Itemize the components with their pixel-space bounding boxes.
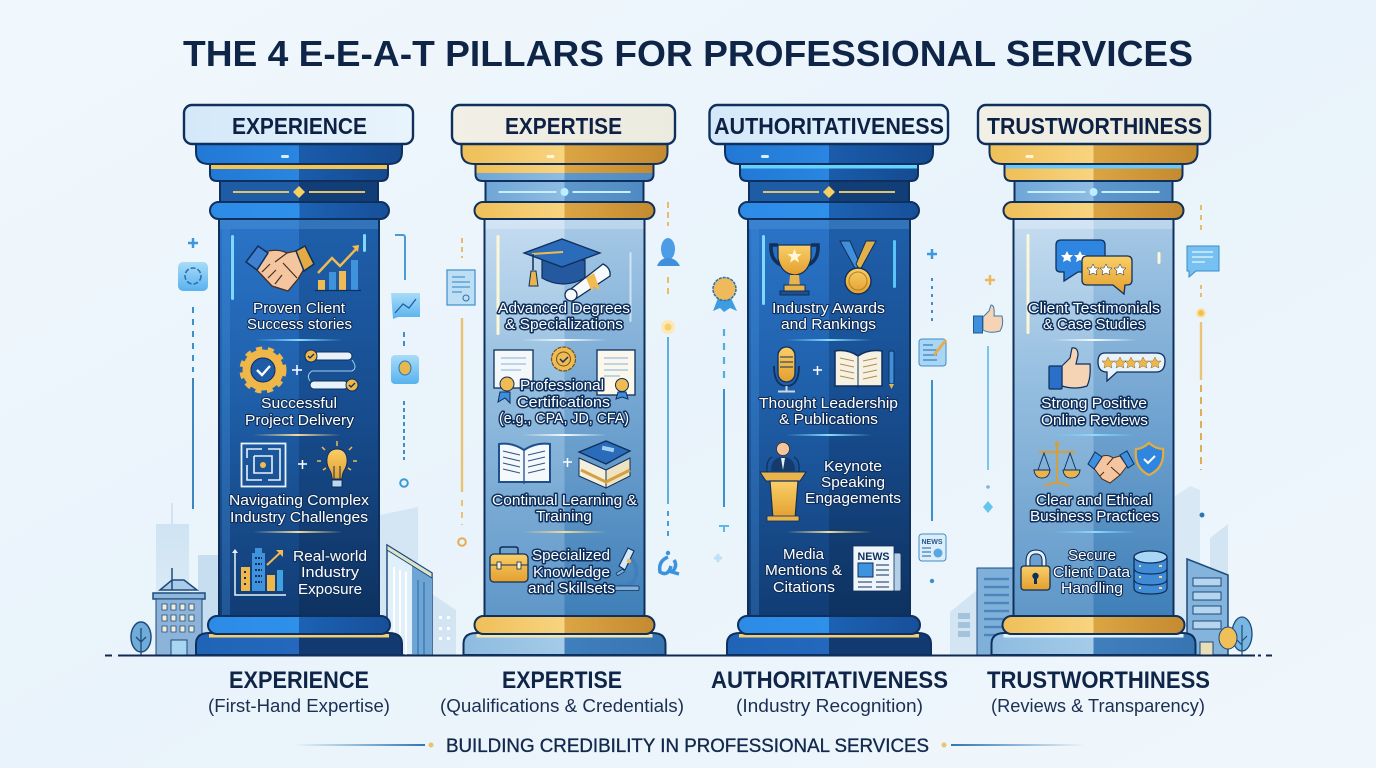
text: proven client success stories: Proven Client	[253, 300, 346, 317]
text: keynote speaking engagements: Keynote	[824, 458, 882, 475]
text: professional certifications: Certifications	[517, 394, 610, 411]
side decorations: pillar 1	[178, 235, 420, 509]
text: keynote speaking engagements: Speaking	[821, 474, 885, 491]
skyline: left of pillar 1	[131, 503, 219, 655]
icon: briefcase	[490, 547, 528, 582]
text: thought leadership: Thought Leadership	[759, 395, 898, 412]
side decorations: pillar 4	[974, 205, 1219, 513]
ground line	[105, 654, 1272, 656]
text: continual learning: Training	[536, 508, 592, 525]
text: specialized knowledge: Specialized	[532, 547, 610, 564]
capital	[462, 144, 668, 219]
base	[196, 616, 402, 655]
text: real-world industry exposure: Real-world	[293, 548, 367, 565]
icon: city chart	[232, 548, 286, 595]
base	[464, 616, 666, 655]
icon: scales, handshake, shield	[1034, 442, 1163, 486]
icon: newspaper: NEWS	[858, 551, 890, 563]
text: successful project delivery: Project Delivery	[245, 412, 355, 429]
capital	[990, 144, 1198, 219]
caption: experience: (First-Hand Expertise)	[208, 696, 390, 716]
icon: microscope	[615, 548, 639, 590]
caption: authoritativeness: AUTHORITATIVENESS	[711, 667, 948, 694]
text: real-world industry exposure: Exposure	[298, 581, 362, 598]
text: navigating complex industry challenges	[229, 492, 370, 526]
pillar 2: expertise	[462, 144, 668, 655]
label: expertise	[452, 105, 675, 144]
capital	[725, 144, 933, 219]
text: media mentions: Citations	[773, 579, 835, 596]
text: professional certifications: Professional	[520, 377, 604, 394]
label: experience	[184, 105, 413, 144]
text: industry awards: Industry Awards	[772, 300, 885, 317]
text: successful project delivery	[245, 395, 355, 429]
icon: trophy and medal	[771, 241, 876, 295]
icon: open book and book stack	[499, 441, 630, 488]
text: proven client success stories	[247, 300, 352, 333]
text: specialized knowledge: and Skillsets	[528, 580, 615, 597]
text: continual learning	[492, 492, 637, 525]
icon: database	[1134, 551, 1167, 594]
pillar 3: authoritativeness	[725, 144, 933, 655]
text: strong positive reviews: Online Reviews	[1041, 412, 1148, 429]
text: client testimonials	[1028, 300, 1160, 333]
icon: microphone, book and pen	[774, 347, 894, 392]
shaft	[484, 219, 644, 617]
text: media mentions: Mentions &	[765, 562, 842, 579]
caption: expertise: (Qualifications & Credentials)	[440, 696, 684, 716]
pillar 4: trustworthiness	[990, 144, 1198, 655]
text: secure client data: Client Data	[1053, 564, 1131, 581]
text: secure client data: Handling	[1061, 580, 1123, 597]
footer tagline	[295, 736, 1085, 757]
shaft	[1014, 219, 1174, 617]
caption: expertise: EXPERTISE	[502, 667, 622, 694]
text: client testimonials: & Case Studies	[1043, 316, 1145, 333]
text: specialized knowledge: Knowledge	[533, 564, 610, 581]
text: real-world industry exposure: Industry	[301, 564, 360, 581]
label: trustworthiness	[978, 105, 1210, 144]
footer tagline: BUILDING CREDIBILITY IN PROFESSIONAL SERVICES	[446, 736, 929, 757]
text: continual learning: Continual Learning &	[492, 492, 637, 509]
icon: thumbs up and rating	[1049, 348, 1165, 389]
text: navigating complex industry challenges: Navigating Complex	[229, 492, 370, 509]
side decorations: pillar 3	[713, 249, 946, 583]
text: media mentions: Media	[783, 546, 825, 563]
text: proven client success stories: Success stories	[247, 316, 352, 333]
text: strong positive reviews	[1041, 395, 1148, 429]
label: trustworthiness: TRUSTWORTHINESS	[987, 113, 1202, 139]
label: experience: EXPERIENCE	[232, 113, 367, 139]
icon: graduation cap and diploma	[524, 239, 610, 301]
text: clear and ethical: Clear and Ethical	[1036, 492, 1152, 509]
text: media mentions	[765, 546, 842, 596]
shaft	[748, 219, 910, 617]
text: navigating complex industry challenges: Industry Challenges	[230, 509, 368, 526]
text: secure client data	[1053, 547, 1131, 597]
text: advanced degrees	[498, 300, 630, 333]
title: THE 4 E-E-A-T PILLARS FOR PROFESSIONAL SERVICES	[183, 33, 1193, 74]
text: industry awards: and Rankings	[781, 316, 876, 333]
text: successful project delivery: Successful	[261, 395, 337, 412]
side decorations: pillar 3: NEWS	[922, 539, 943, 546]
text: keynote speaking engagements	[805, 458, 901, 507]
text: clear and ethical	[1030, 492, 1159, 525]
text: advanced degrees: Advanced Degrees	[498, 300, 630, 317]
base	[992, 616, 1196, 655]
label: expertise: EXPERTISE	[505, 113, 622, 139]
text: strong positive reviews: Strong Positive	[1041, 395, 1147, 412]
icon: newspaper	[853, 546, 901, 591]
skyline: right of pillar 1	[380, 507, 456, 655]
capital	[196, 144, 402, 219]
base	[727, 616, 931, 655]
icon: handshake and growth chart	[246, 245, 361, 291]
text: client testimonials: Client Testimonials	[1028, 300, 1160, 317]
caption: expertise	[440, 667, 684, 716]
text: thought leadership: & Publications	[779, 411, 878, 428]
side decorations: pillar 2	[447, 202, 680, 574]
label: authoritativeness	[710, 105, 948, 144]
text: thought leadership	[759, 395, 898, 428]
text: keynote speaking engagements: Engagements	[805, 490, 901, 507]
icon: padlock	[1021, 552, 1050, 590]
caption: experience	[208, 667, 390, 716]
caption: trustworthiness: TRUSTWORTHINESS	[987, 667, 1210, 694]
skyline: left of pillar 4	[950, 568, 1014, 655]
caption: experience: EXPERIENCE	[229, 667, 369, 694]
icon: testimonial speech bubbles	[1056, 240, 1132, 294]
icon: gear and checklist	[242, 349, 358, 391]
text: professional certifications: (e.g., CPA, JD, CFA)	[499, 410, 629, 427]
caption: trustworthiness: (Reviews & Transparency)	[991, 696, 1205, 716]
text: secure client data: Secure	[1068, 547, 1116, 564]
label: authoritativeness: AUTHORITATIVENESS	[714, 113, 944, 139]
caption: trustworthiness	[987, 667, 1210, 716]
text: industry awards	[772, 300, 885, 333]
caption: authoritativeness: (Industry Recognition)	[736, 696, 923, 716]
text: clear and ethical: Business Practices	[1030, 508, 1159, 525]
text: specialized knowledge	[528, 547, 615, 597]
shaft	[219, 219, 379, 617]
icon: speaker at podium	[760, 442, 806, 521]
text: advanced degrees: & Specializations	[505, 316, 623, 333]
icon: maze and light bulb	[242, 441, 357, 487]
icon: certificates and seal	[494, 347, 635, 403]
caption: authoritativeness	[711, 667, 948, 716]
pillar 1: experience	[196, 144, 402, 655]
skyline: right of pillar 4	[1174, 486, 1252, 655]
text: real-world industry exposure	[293, 548, 367, 598]
text: professional certifications	[499, 377, 629, 427]
